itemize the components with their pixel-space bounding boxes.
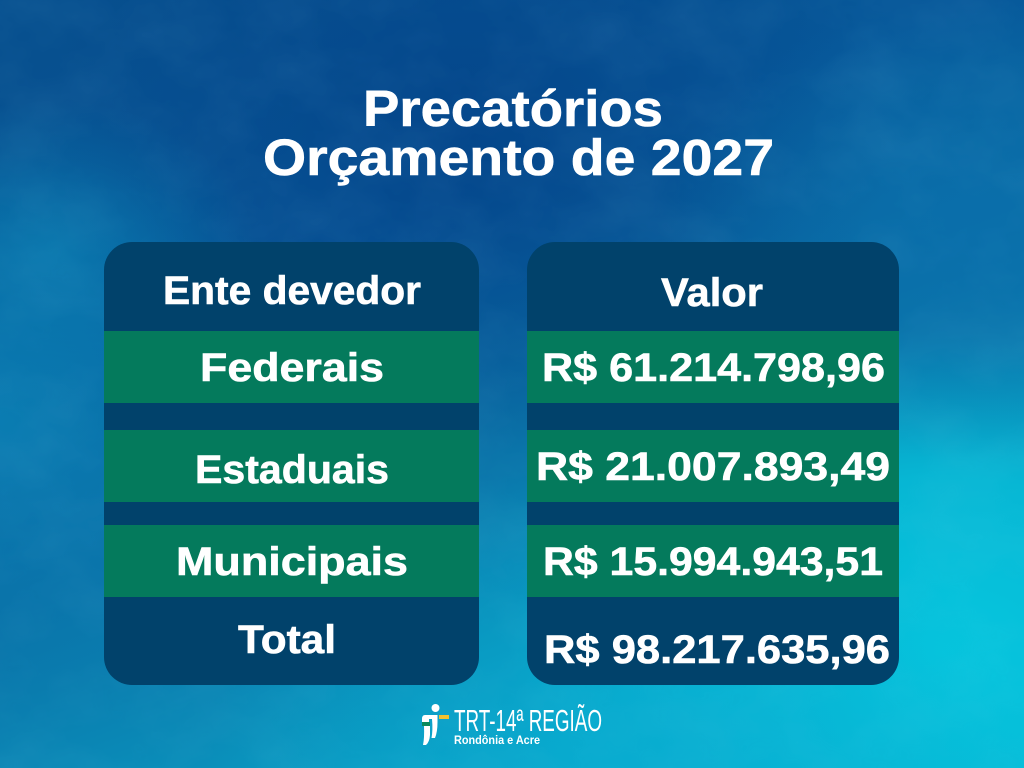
heading: Valor: Valor xyxy=(661,271,763,315)
logo subtitle: Rondônia e Acre xyxy=(454,733,540,747)
row: valor municipais xyxy=(527,525,899,597)
label: Estaduais: Estaduais xyxy=(195,448,389,492)
row: valor estaduais xyxy=(527,430,899,502)
label: Federais: Federais xyxy=(200,346,384,390)
title: Precatórios xyxy=(363,80,663,137)
row: Estaduais xyxy=(104,430,479,502)
label: Total: Total xyxy=(238,618,336,662)
value: total: R$ 98.217.635,96 xyxy=(544,628,890,672)
heading: Ente devedor: Ente devedor xyxy=(163,269,421,313)
title xyxy=(263,80,774,186)
value: municipais: R$ 15.994.943,51 xyxy=(543,540,883,584)
logo: TRT-14 xyxy=(422,703,602,747)
value: federais: R$ 61.214.798,96 xyxy=(542,346,885,390)
panel: valor xyxy=(527,242,899,685)
icon: TRT figure xyxy=(422,704,449,745)
value: estaduais: R$ 21.007.893,49 xyxy=(536,445,890,489)
panel: ente devedor xyxy=(104,242,479,685)
row: valor federais xyxy=(527,331,899,403)
logo name: TRT-14ª REGIÃO xyxy=(454,703,602,738)
row: Federais xyxy=(104,331,479,403)
row: Municipais xyxy=(104,525,479,597)
label: Municipais: Municipais xyxy=(176,540,408,584)
title: Orçamento de 2027 xyxy=(263,129,774,186)
